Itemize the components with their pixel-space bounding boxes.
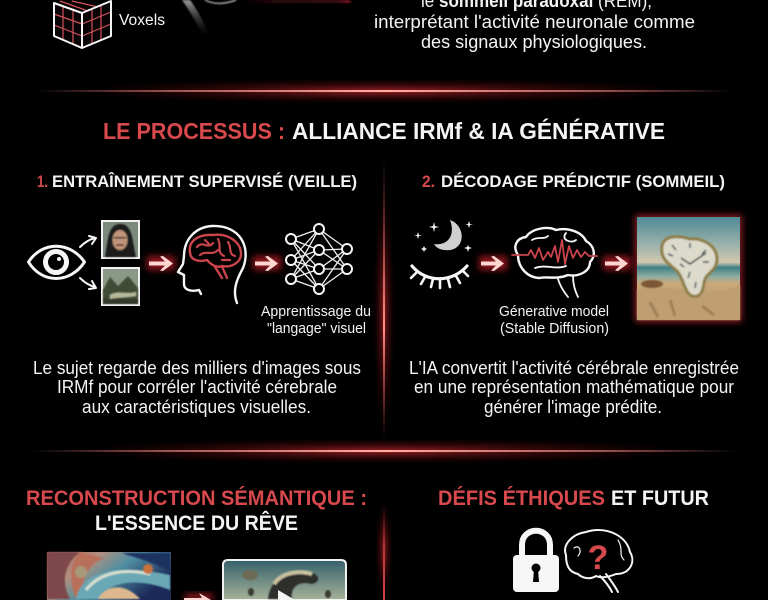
image: video reconstruction with play button [223,560,346,600]
heading: semantic reconstruction: L'ESSENCE DU RÊVE [95,511,298,535]
caption: generative model: Génerative model [499,303,609,320]
caption: generative model: (Stable Diffusion) [500,320,609,337]
heading: ethics [438,487,709,510]
divider: vertical bottom [375,500,393,600]
icon: head with red brain [178,226,246,303]
text: step 1 description: IRMf pour corréler l'activité cérebrale [57,377,337,397]
arrow: dream to video [184,593,213,600]
icon: small arrows from eye [80,236,96,289]
title: process: ALLIANCE IRMf & IA GÉNÉRATIVE [292,117,665,144]
divider: vertical middle [373,158,395,440]
caption: visual language [261,303,371,337]
heading: step 1: 1. [37,172,48,191]
title: process: LE PROCESSUS : [103,118,285,144]
intro text: des signaux physiologiques. [421,32,647,52]
heading: ethics: ET FUTUR [611,487,709,510]
title: process [103,117,665,144]
icon: moon and stars [414,220,473,252]
caption: generative model [499,303,609,337]
heading: step 2: DÉCODAGE PRÉDICTIF (SOMMEIL) [441,172,725,191]
arrow: eye to head [147,256,175,271]
icon: brain with question mark: ? [588,539,608,577]
intro text: interprétant l'activité neuronale comme [374,12,695,32]
icon: brain with question mark [565,530,632,592]
intro text [374,0,695,52]
arrow: model to image [603,256,631,271]
heading: step 2: 2. [422,172,435,191]
arrow: head to network [253,256,281,271]
icon: brain with signal [512,228,597,297]
text: step 1 description [33,358,361,417]
top brain fragment [182,0,354,36]
text: step 2 description [409,358,739,417]
image: galaxy dream [47,552,171,600]
text: step 2 description: L'IA convertit l'activité cérébrale enregistrée [409,358,739,378]
icon: padlock [513,531,559,592]
heading: semantic reconstruction: RECONSTRUCTION SÉMANTIQUE : [26,487,367,510]
icon: voxels cube [54,1,111,48]
divider: top [35,78,733,104]
caption: visual language: Apprentissage du [261,303,371,320]
caption: visual language: "langage" visuel [267,320,366,337]
text: step 1 description: aux caractéristiques visuelles. [82,397,311,417]
heading: semantic reconstruction [26,487,367,535]
arrow: sleep to model [479,256,507,271]
text: step 1 description: Le sujet regarde des milliers d'images sous [33,358,361,378]
divider: lower [30,438,738,464]
icon: neural network [286,224,352,294]
icon: eye [28,246,84,278]
heading: ethics: DÉFIS ÉTHIQUES [438,487,605,510]
image: landscape [101,267,140,306]
text: step 2 description: en une représentation mathématique pour [414,377,734,397]
label: voxels: Voxels [119,12,165,29]
text: step 2 description: générer l'image prédite. [484,397,662,417]
image: portrait [101,220,140,259]
image: melting clock on beach [635,215,742,322]
heading: step 1: ENTRAÎNEMENT SUPERVISÉ (VEILLE) [52,172,357,191]
icon: closed eye [411,266,468,288]
